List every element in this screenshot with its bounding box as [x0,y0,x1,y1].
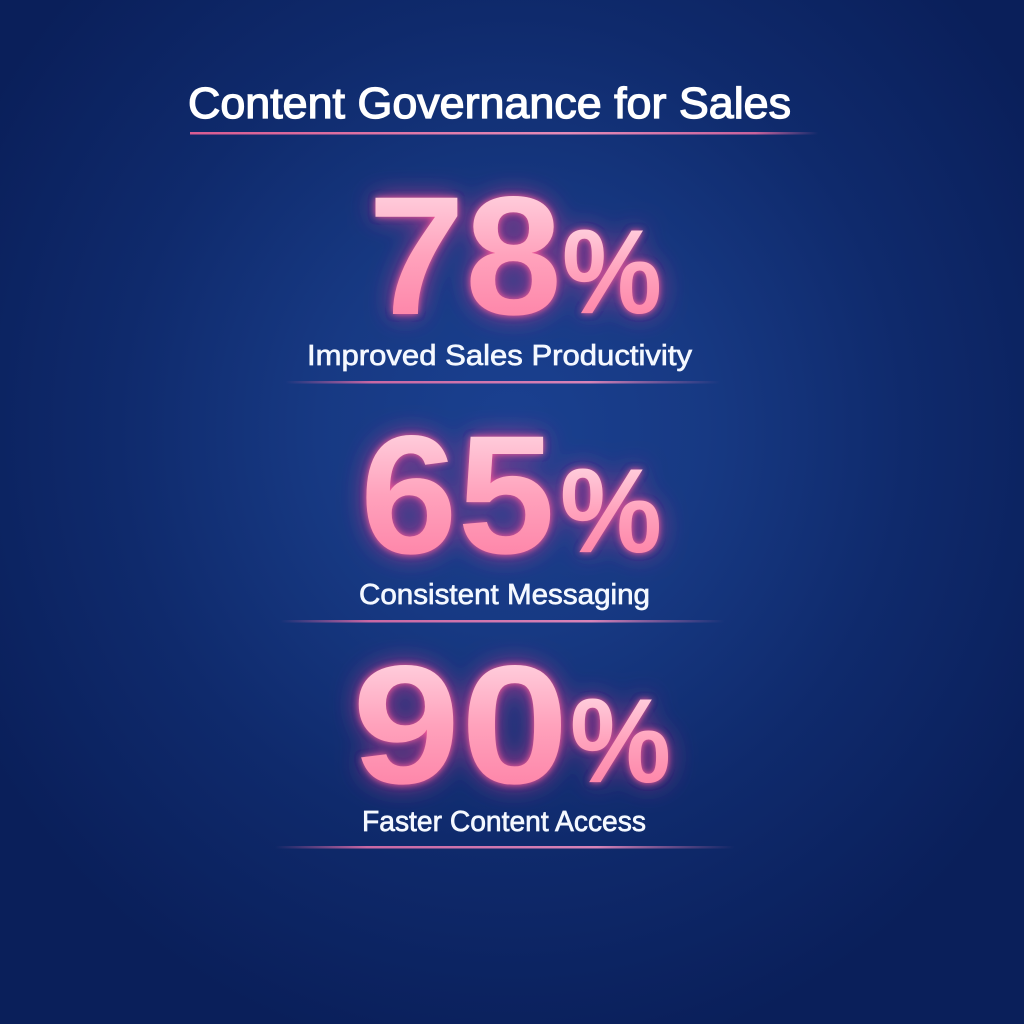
divider [285,381,720,384]
number: 78%: % [562,205,662,339]
label: faster content access: Faster Content Access [362,806,646,838]
number: 78%: 78 [368,161,562,350]
divider [280,620,725,622]
title: Content Governance for Sales [188,79,791,128]
divider [275,846,735,848]
number: 78% [368,161,662,350]
number: 90%: % [570,674,671,808]
stat: 78% improved sales productivity [285,161,720,384]
number: 65% [360,400,662,589]
stat: 90% faster content access [275,630,735,848]
label: consistent messaging: Consistent Messaging [359,579,650,611]
number: 65%: 65 [360,400,555,589]
number: 65%: % [560,444,662,578]
label: improved sales productivity: Improved Sales Productivity [307,340,693,372]
number: 90% [352,630,671,819]
number: 90%: 90 [352,630,569,819]
stat: 65% consistent messaging [280,400,725,622]
title underline [190,132,818,134]
